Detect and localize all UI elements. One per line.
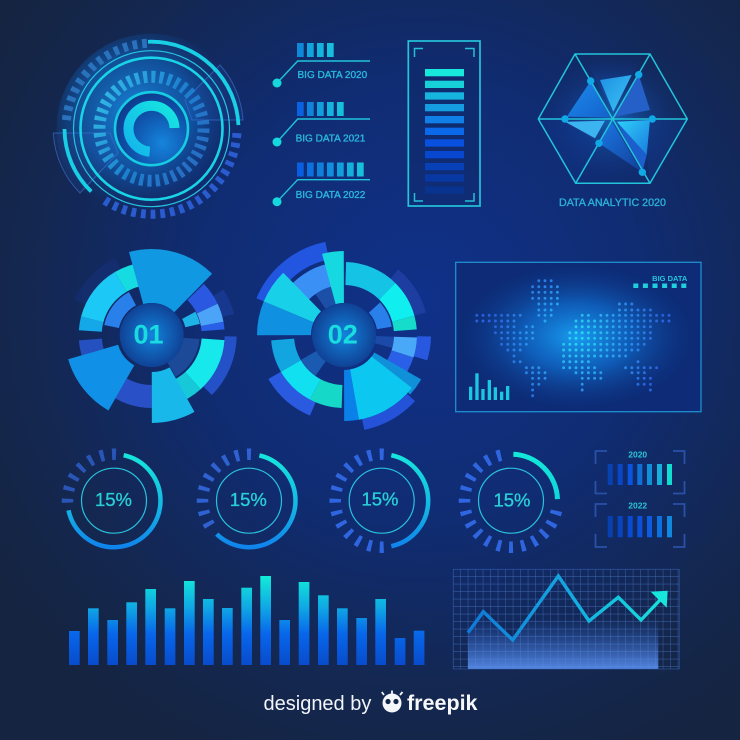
footer credit: freepik xyxy=(407,691,478,715)
donut chart 02 xyxy=(252,244,436,426)
gauge 3 xyxy=(335,454,428,547)
hexagon radar xyxy=(538,54,687,209)
year bar widget 2022: 2022 xyxy=(628,500,647,510)
gauge 1: 15% xyxy=(95,489,132,510)
dotted continents xyxy=(477,281,669,396)
gauge 4 xyxy=(464,454,558,547)
item 2022 xyxy=(272,162,370,206)
outer accent arcs xyxy=(64,42,238,216)
panel: vertical level meter xyxy=(408,41,480,206)
footer credit: designed by xyxy=(264,693,371,715)
bars 2022 xyxy=(608,516,672,537)
radar shards xyxy=(540,57,687,183)
gauge 3: 15% xyxy=(361,488,399,510)
footer credit xyxy=(264,690,478,715)
item 2021: BIG DATA 2021 xyxy=(296,134,366,144)
big data list xyxy=(272,43,370,206)
arrow head xyxy=(651,591,668,608)
panel: world map xyxy=(456,262,701,412)
gauge 4: 15% xyxy=(493,490,531,511)
radar nodes xyxy=(561,71,656,176)
bar chart xyxy=(69,576,424,665)
legend squares xyxy=(633,284,686,288)
hexagon radar: DATA ANALYTIC 2020 xyxy=(559,197,666,209)
year bar widget 2020 xyxy=(596,450,684,494)
area under line xyxy=(468,576,658,669)
year bar widget 2020: 2020 xyxy=(628,450,647,460)
faint outline shapes xyxy=(53,65,243,193)
letter-C arc xyxy=(128,106,174,152)
grid xyxy=(453,569,679,669)
icon: freepik logo xyxy=(382,690,402,712)
donut chart 01: 01 xyxy=(133,319,164,349)
panel label: BIG DATA xyxy=(652,274,688,283)
year bar widget 2022 xyxy=(596,500,684,547)
main rings xyxy=(80,58,222,200)
bars 2020 xyxy=(608,464,672,485)
outer ticks upper left xyxy=(66,43,237,214)
item 2020 xyxy=(272,43,370,88)
level bars xyxy=(425,69,464,194)
radial ticks xyxy=(100,77,204,181)
gauge 1 xyxy=(68,454,160,547)
radial HUD dial xyxy=(53,34,246,224)
item 2022: BIG DATA 2022 xyxy=(296,190,366,201)
item 2021 xyxy=(272,102,370,146)
item 2020: BIG DATA 2020 xyxy=(298,70,368,81)
donut chart 01 xyxy=(73,256,231,414)
trend line xyxy=(468,576,660,640)
line chart xyxy=(453,569,679,669)
hexagon outline and spokes xyxy=(538,54,687,183)
outer ticks lower right xyxy=(66,43,237,214)
gauge 2: 15% xyxy=(230,489,267,510)
donut chart 02: 02 xyxy=(328,319,358,349)
mini bar chart xyxy=(469,373,509,400)
gauge 2 xyxy=(202,454,296,547)
